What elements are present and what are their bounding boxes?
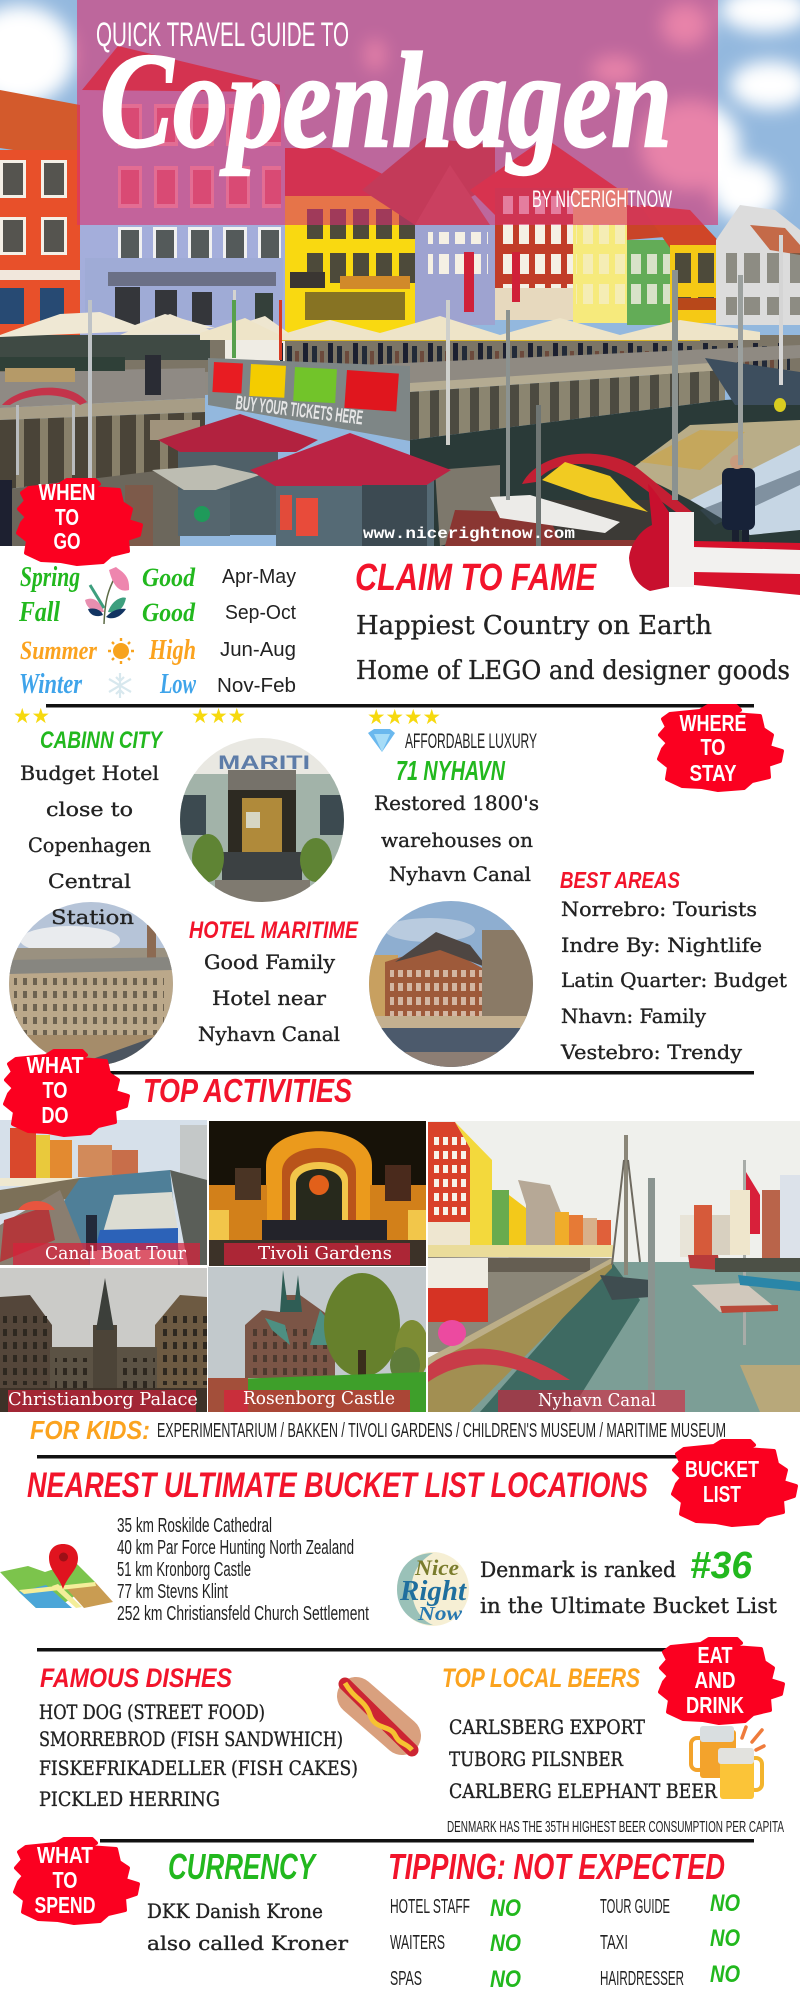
title block [96, 16, 672, 213]
hotel: 71 Nyhavn: Restored 1800's [374, 791, 539, 815]
url text: www.nicerightnow.com [363, 525, 575, 543]
panel: when to go table: Nov-Feb [217, 675, 296, 697]
tipping table [388, 1846, 740, 1993]
badge: what to spend: WHAT [37, 1842, 93, 1868]
badge: where to stay: WHERE [680, 710, 746, 736]
badge: where to stay: TO [700, 734, 726, 760]
panel: claim to fame [355, 557, 790, 686]
tipping table: NO [710, 1961, 740, 1988]
rating stars: two: ★★ [13, 704, 50, 728]
best areas list: Norrebro: Tourists [561, 897, 757, 921]
hotel: Hotel Maritime: HOTEL MARITIME [189, 917, 359, 944]
currency [147, 1846, 348, 1955]
ranking text: #36 [690, 1545, 753, 1587]
badge: bucket list: BUCKET [685, 1456, 759, 1482]
best areas list [560, 867, 787, 1064]
hotel: Cabinn City: Copenhagen [28, 833, 151, 857]
rating stars: three: ★★★ [191, 704, 246, 728]
tipping table: HAIRDRESSER [600, 1968, 684, 1990]
beer list: TUBORG PILSNBER [449, 1747, 624, 1771]
logo: Nice Right Now: Right [399, 1576, 467, 1607]
tipping table: TOUR GUIDE [600, 1896, 670, 1918]
ranking text: Denmark is ranked [480, 1558, 676, 1582]
heading: top local beers: TOP LOCAL BEERS [442, 1663, 640, 1693]
main title: Copenhagen [100, 26, 672, 176]
dish list: HOT DOG (STREET FOOD) [39, 1700, 265, 1724]
panel: when to go table: Summer [20, 636, 98, 665]
panel: what to spend [15, 1839, 740, 1993]
location list: 77 km Stevns Klint [117, 1581, 228, 1603]
sign text: BUY YOUR TICKETS HERE [234, 392, 364, 430]
badge: when to go [18, 479, 141, 564]
photo: Hotel Maritime entrance: MARITI [218, 753, 310, 774]
photo: Christianborg Palace: Christianborg Palace [8, 1389, 198, 1410]
for kids line [30, 1415, 726, 1445]
hotel: Cabinn City: Central [48, 869, 131, 893]
photo: canal boat tour [0, 1120, 207, 1265]
hotel: Hotel Maritime: Nyhavn Canal [198, 1022, 340, 1046]
badge: eat and drink: DRINK [686, 1692, 744, 1718]
photo: Cabinn City hotel [9, 902, 174, 1067]
badge: what to do: DO [42, 1102, 68, 1128]
badge: when to go: TO [55, 504, 79, 530]
tipping table: NO [710, 1925, 740, 1952]
logo: Nice Right Now [397, 1552, 469, 1626]
panel: when to go table: Winter [19, 669, 83, 700]
icon: diamond [368, 729, 395, 752]
badge: where to stay: STAY [690, 760, 736, 786]
panel: bucket list [0, 1441, 796, 1626]
beer list: CARLSBERG EXPORT [449, 1715, 646, 1739]
badge: when to go: GO [54, 528, 80, 554]
kiosks [0, 414, 451, 546]
ranking text [480, 1545, 778, 1618]
byline: BY NICERIGHTNOW [532, 186, 672, 213]
photo: Hotel Maritime entrance [180, 738, 346, 905]
panel: when to go table: Fall [18, 597, 60, 628]
hotel: Hotel Maritime [189, 917, 359, 1046]
badge: when to go: WHEN [38, 479, 96, 505]
location list: 252 km Christiansfeld Church Settlement [117, 1603, 369, 1625]
hotel: 71 Nyhavn: Nyhavn Canal [389, 862, 531, 886]
logo: Nice Right Now: Now [417, 1603, 463, 1625]
canal tour boat [445, 454, 755, 546]
panel: when to go table: Good [142, 598, 196, 627]
overlay panel [77, 0, 718, 225]
badge: eat and drink: AND [694, 1667, 736, 1693]
for kids line: FOR KIDS: [30, 1415, 150, 1445]
hotel: Cabinn City [20, 727, 164, 893]
tipping table: NO [710, 1890, 740, 1917]
panel: when to go table: Jun-Aug [220, 639, 296, 661]
beer list [449, 1715, 718, 1803]
best areas list: BEST AREAS [560, 867, 681, 893]
badge: bucket list: LIST [703, 1481, 741, 1507]
hotel: Cabinn City: Budget Hotel [20, 761, 159, 785]
photo: 71 Nyhavn building [368, 900, 534, 1070]
seasons: Spring [20, 562, 80, 593]
panel: when to go table [18, 562, 296, 700]
ranking text: in the Ultimate Bucket List [480, 1594, 778, 1618]
months: Apr-May [222, 566, 296, 588]
badge: what to spend [15, 1839, 138, 1923]
hotel: 71 Nyhavn: AFFORDABLE LUXURY [405, 730, 537, 753]
currency: DKK Danish Krone [147, 1899, 323, 1923]
location list: 51 km Kronborg Castle [117, 1559, 251, 1581]
right quay and water [205, 345, 800, 546]
tipping table: NO [490, 1930, 521, 1957]
panel: where to stay [9, 704, 787, 1070]
tipping table: WAITERS [390, 1932, 445, 1954]
left cafe and quay [0, 355, 205, 546]
best areas list: Latin Quarter: Budget [561, 968, 787, 992]
icon: hand with Danish flag [629, 484, 800, 595]
tipping table: TAXI [600, 1932, 628, 1954]
badge: what to do [5, 1051, 128, 1135]
umbrellas and crowd [0, 312, 800, 375]
panel: when to go table: Low [159, 669, 196, 700]
hotel: Cabinn City: close to [46, 797, 133, 821]
hero photo: Nyhavn harbour [0, 0, 800, 546]
hotel: Hotel Maritime: Good Family [204, 950, 336, 974]
heading: famous dishes: FAMOUS DISHES [40, 1663, 232, 1693]
location list: 35 km Roskilde Cathedral [117, 1515, 272, 1537]
panel: when to go table: High [148, 635, 196, 666]
badge: what to do: WHAT [26, 1052, 84, 1078]
location list: 40 km Par Force Hunting North Zealand [117, 1537, 354, 1559]
dish list: FISKEFRIKADELLER (FISH CAKES) [39, 1756, 358, 1780]
logo: Nice Right Now: Nice [414, 1555, 459, 1580]
lamp poles [88, 235, 783, 546]
photo: Tivoli Gardens [209, 1121, 426, 1266]
hotel: 71 Nyhavn: warehouses on [381, 828, 533, 852]
dish list [39, 1700, 358, 1811]
icon: flower [85, 567, 129, 624]
ratings: Good [142, 563, 196, 592]
tipping table: HOTEL STAFF [390, 1896, 470, 1918]
tipping table: NO [490, 1966, 521, 1993]
dish list: PICKLED HERRING [39, 1787, 220, 1811]
icon: hot dog [345, 1683, 412, 1750]
badge: eat and drink: EAT [698, 1642, 732, 1668]
photo grid: top activities [0, 1120, 800, 1412]
currency: also called Kroner [147, 1931, 348, 1955]
ticket sign [208, 358, 410, 441]
text line: Happiest Country on Earth [356, 611, 712, 641]
tipping table: NO [490, 1895, 521, 1922]
badge: what to spend: SPEND [34, 1892, 96, 1918]
best areas list: Vestebro: Trendy [560, 1040, 743, 1064]
station text over photo: Station [51, 905, 134, 929]
beer list: CARLBERG ELEPHANT BEER [449, 1779, 718, 1803]
hotel: 71 Nyhavn: 71 NYHAVN [396, 755, 506, 786]
icon: beer mugs [691, 1726, 764, 1799]
icon: map with pin [0, 1544, 113, 1608]
photo: Tivoli Gardens: Tivoli Gardens [258, 1243, 392, 1264]
photo: Rosenborg Castle [208, 1267, 429, 1412]
badge: eat and drink [660, 1639, 783, 1723]
photo: canal boat tour: Canal Boat Tour [45, 1243, 186, 1264]
panel: when to go table: Sep-Oct [225, 602, 296, 624]
badge: bucket list [673, 1441, 796, 1525]
hotel: Cabinn City: CABINN CITY [40, 727, 164, 754]
best areas list: Nhavn: Family [561, 1004, 707, 1028]
heading: top activities: TOP ACTIVITIES [143, 1072, 352, 1109]
kicker: QUICK TRAVEL GUIDE TO [96, 16, 349, 54]
photo: Nyhavn Canal: Nyhavn Canal [538, 1390, 656, 1411]
heading: CLAIM TO FAME [355, 557, 597, 599]
badge: what to spend: TO [52, 1867, 78, 1893]
photo: Rosenborg Castle: Rosenborg Castle [243, 1388, 395, 1409]
badge: where to stay [659, 706, 782, 790]
tipping table: SPAS [390, 1968, 422, 1990]
best areas list: Indre By: Nightlife [561, 933, 762, 957]
icon: sun [108, 638, 134, 664]
dish list: SMORREBROD (FISH SANDWHICH) [39, 1727, 343, 1751]
icon: snowflake [109, 673, 131, 698]
hotel: Hotel Maritime: Hotel near [212, 986, 326, 1010]
badge: what to do: TO [42, 1077, 68, 1103]
photo: Christianborg Palace [0, 1268, 207, 1412]
hotel: 71 Nyhavn [374, 730, 539, 886]
panel: eat and drink [39, 1639, 784, 1836]
rating stars: four: ★★★★ [367, 705, 441, 729]
photo: Nyhavn Canal [428, 1121, 800, 1412]
location list [117, 1515, 369, 1625]
currency: CURRENCY [168, 1846, 317, 1887]
